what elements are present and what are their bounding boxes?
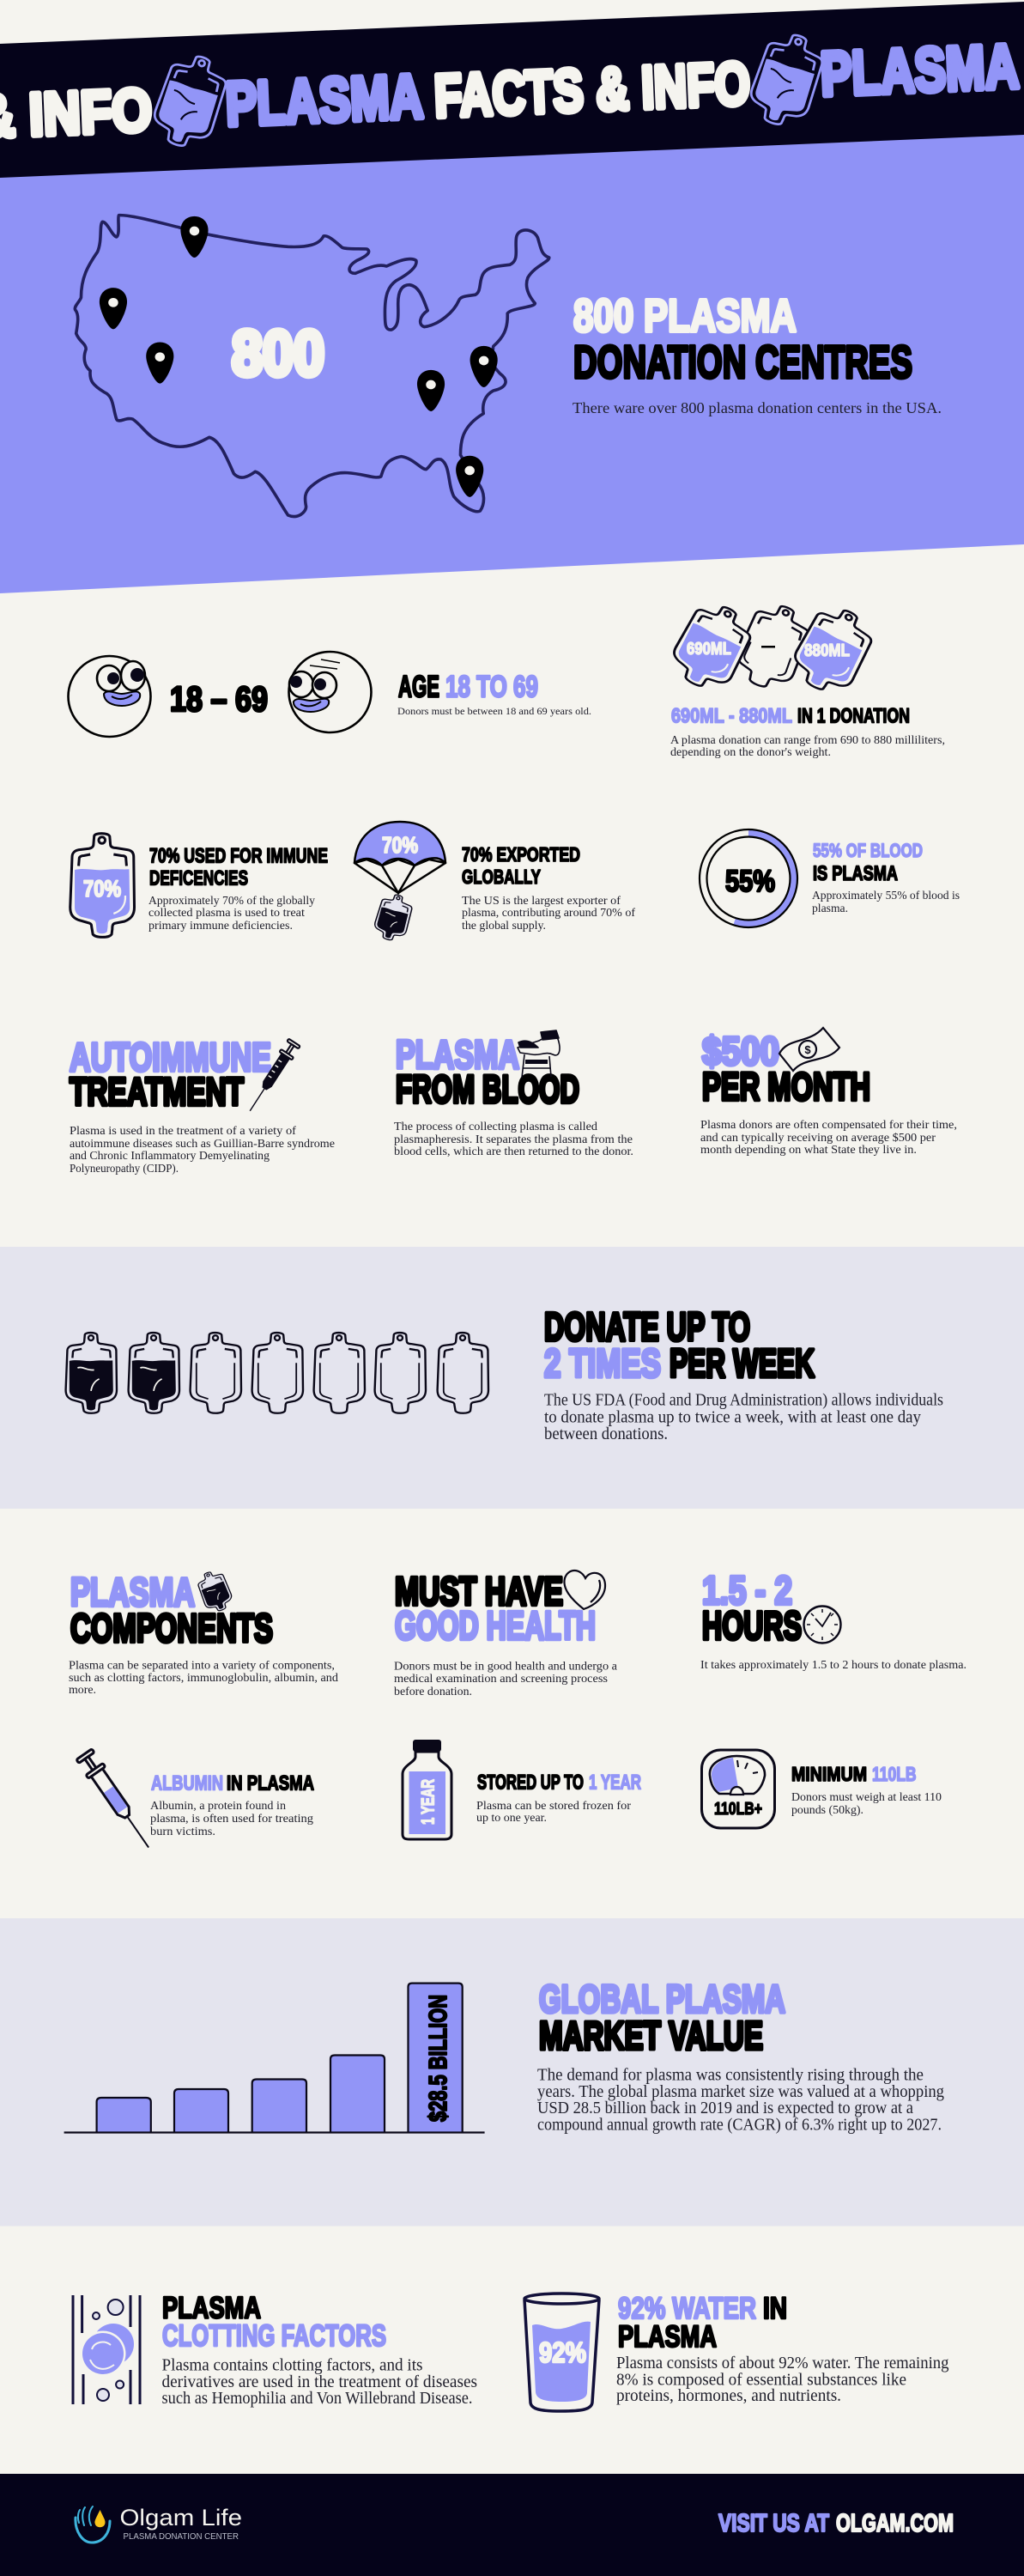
icon: heart (564, 1571, 605, 1609)
body text (812, 890, 960, 915)
heading: 690ml - 880ml in 1 donation (671, 704, 910, 728)
heading: IN (763, 2292, 787, 2325)
body text: The US FDA (Food and Drug Administration) allows individuals (544, 1391, 943, 1410)
heading: 690ml - 880ml in 1 donation: 690ML - 880ML (671, 704, 792, 728)
heading: 92% WATER (618, 2292, 756, 2325)
heading: GLOBAL PLASMA (539, 1977, 785, 2021)
heading: 110LB (872, 1763, 917, 1785)
banner text plasma: PLASMA (224, 63, 424, 139)
icon: weighing scale: 110LB+ (714, 1799, 762, 1819)
body text: plasma, is often used for treating (150, 1813, 313, 1826)
body text: Plasma donors are often compensated for their time, (700, 1119, 957, 1132)
icon: blood vessel with clotting cells (73, 2295, 140, 2404)
panel: hero 800 donation centres (0, 133, 1024, 593)
body text (670, 734, 945, 759)
call to action: VISIT US AT (718, 2510, 829, 2537)
banner: plasma facts and info ticker (0, 2, 1024, 178)
body text: to donate plasma up to twice a week, with at least one day (544, 1408, 921, 1427)
bar chart (64, 1984, 485, 2133)
body text (148, 895, 315, 933)
body text: Donors must be in good health and undergo a (394, 1661, 618, 1673)
heading: DEFICENCIES (149, 867, 248, 890)
body text: Plasma can be stored frozen for (476, 1800, 631, 1813)
panel: 55% of blood is plasma (700, 829, 960, 927)
panel: must have good health (394, 1569, 618, 1698)
body text: Plasma can be separated into a variety of components, (69, 1659, 335, 1673)
icon: banner plasma bag right (744, 27, 829, 132)
heading (702, 1029, 870, 1109)
body text: plasma, contributing around 70% of (462, 907, 635, 920)
body text (700, 1119, 957, 1157)
panel: global plasma market value (0, 1918, 1024, 2226)
heading (151, 1772, 314, 1795)
body text: blood cells, which are then returned to the donor. (394, 1145, 633, 1158)
heading: GLOBALLY (462, 866, 541, 888)
heading (162, 2291, 386, 2353)
body text: primary immune deficiencies. (148, 920, 293, 933)
body text (476, 1800, 631, 1825)
icon: parachute carrying plasma bag: 70% (382, 832, 418, 858)
heading (618, 2292, 787, 2354)
heading: PER MONTH (702, 1065, 870, 1109)
panel: $500 per month (700, 1028, 957, 1157)
panel: 690ml to 880ml (664, 595, 945, 759)
donut chart 55%: 55% (725, 865, 775, 898)
age range label: 18 – 69 (170, 679, 268, 719)
body text: The demand for plasma was consistently rising through the (537, 2066, 924, 2085)
icon row: seven plasma bags, two filled (66, 1333, 488, 1413)
body text: Polyneuropathy (CIDP). (70, 1163, 179, 1176)
panel: 1.5 - 2 hours (700, 1568, 966, 1672)
body text (462, 895, 635, 933)
body text: Donors must be between 18 and 69 years old. (397, 705, 591, 717)
heading: PLASMA (618, 2320, 717, 2354)
heading (702, 1568, 802, 1648)
logo: olgam life: PLASMA DONATION CENTER (124, 2531, 239, 2542)
body text: compound annual growth rate (CAGR) of 6.3% right up to 2027. (537, 2116, 942, 2135)
panel: albumin in plasma (76, 1748, 314, 1853)
logo: olgam life: Olgam Life (120, 2505, 242, 2530)
panel: stored up to 1 year (403, 1740, 641, 1839)
footer (0, 2474, 1024, 2576)
heading: 70% USED FOR IMMUNE (149, 845, 328, 867)
body text (70, 1125, 335, 1176)
panel: autoimmune treatment (70, 1035, 335, 1176)
heading (70, 1035, 271, 1114)
heading: age 18 to 69: AGE (398, 670, 439, 704)
body text (161, 2356, 477, 2408)
body text (150, 1800, 313, 1838)
body text: USD 28.5 billion back in 2019 and is expected to grow at a (537, 2099, 913, 2117)
body text: 8% is composed of essential substances like (616, 2372, 906, 2389)
icon: young face (69, 656, 151, 737)
icon: tilted dark plasma bag (194, 1567, 235, 1615)
body text: Albumin, a protein found in (150, 1800, 286, 1813)
donut chart 55% (700, 829, 797, 927)
icon: clock (803, 1606, 841, 1643)
body text: plasmapheresis. It separates the plasma from the (394, 1133, 633, 1146)
heading (395, 1569, 596, 1648)
body text: Approximately 70% of the globally (148, 895, 315, 908)
body text: autoimmune diseases such as Guillian-Barre syndrome (70, 1138, 335, 1151)
body text: the global supply. (462, 920, 546, 933)
body text: The process of collecting plasma is called (394, 1121, 597, 1133)
heading (462, 843, 580, 888)
heading: 1 YEAR (589, 1771, 641, 1795)
body text: Plasma is used in the treatment of a variety of (70, 1125, 296, 1138)
body text: burn victims. (150, 1826, 215, 1838)
icon: donation chair (518, 1030, 560, 1078)
panel: 70% exported globally (354, 822, 635, 944)
heading: 70% EXPORTED (462, 843, 580, 866)
icon: three plasma bags: 690ML (687, 640, 731, 659)
icon: banner plasma bag left (148, 48, 233, 154)
body text: and can typically receiving on average $500 per (700, 1132, 936, 1145)
body text: more. (69, 1684, 96, 1697)
icon: banknote: $ (804, 1043, 811, 1056)
icon: three plasma bags: 880ML (804, 641, 850, 660)
body text (394, 1661, 618, 1698)
heading: 690ml - 880ml in 1 donation: IN 1 DONATION (797, 704, 910, 728)
heading: 55% OF BLOOD (813, 840, 923, 861)
body text: A plasma donation can range from 690 to 880 milliliters, (670, 734, 945, 747)
panel: 70% used for immune deficiencies (70, 834, 328, 937)
hero body text: There ware over 800 plasma donation centers in the USA. (573, 399, 942, 416)
heading: IN PLASMA (227, 1772, 314, 1795)
big number 800: 800 (232, 318, 324, 389)
heading: HOURS (702, 1603, 802, 1648)
body text (69, 1659, 338, 1697)
icon: older face (288, 652, 371, 732)
panel: age 18 to 69 (69, 652, 591, 737)
body text: Donors must weigh at least 110 (791, 1791, 942, 1804)
heading: IS PLASMA (813, 862, 898, 885)
heading: PLASMA (162, 2291, 261, 2325)
body text: medical examination and screening process (394, 1673, 608, 1686)
heading: ALBUMIN (151, 1772, 223, 1795)
body text: Plasma consists of about 92% water. The remaining (616, 2354, 949, 2372)
body text (394, 1121, 633, 1158)
heading: DONATE UP TO (544, 1304, 750, 1349)
heading: 800 plasma donation centres: 800 PLASMA (573, 290, 797, 342)
map of the USA with location pins (75, 216, 549, 516)
heading (544, 1304, 815, 1386)
heading: 2 TIMES (544, 1341, 661, 1386)
panel: donate up to 2 times per week (0, 1247, 1024, 1509)
heading: PER WEEK (670, 1341, 815, 1386)
body text (791, 1791, 942, 1817)
heading: PLASMA (396, 1032, 519, 1077)
heading: TREATMENT (70, 1070, 244, 1114)
heading: AUTOIMMUNE (70, 1035, 271, 1079)
heading: $500 (702, 1029, 779, 1073)
body text: pounds (50kg). (791, 1804, 863, 1817)
heading: PLASMA (70, 1570, 195, 1614)
heading: MARKET VALUE (539, 2013, 763, 2057)
heading: 800 plasma donation centres (573, 290, 912, 388)
panel: plasma from blood (394, 1030, 633, 1158)
icon: 70% plasma bag (70, 834, 134, 937)
heading: MINIMUM (791, 1763, 867, 1785)
heading: CLOTTING FACTORS (162, 2319, 386, 2353)
icon: banknote (779, 1028, 839, 1071)
icon: bottle: 1 YEAR (419, 1779, 438, 1825)
icon: syringe with plasma (76, 1748, 157, 1853)
icon: syringe (244, 1038, 300, 1115)
heading (539, 1977, 785, 2057)
body text: It takes approximately 1.5 to 2 hours to donate plasma. (700, 1659, 966, 1672)
body text: such as clotting factors, immunoglobulin, albumin, and (69, 1672, 338, 1685)
body text: depending on the donor's weight. (670, 746, 831, 759)
panel: minimum 110lb (702, 1750, 942, 1828)
heading: age 18 to 69: 18 TO 69 (445, 670, 538, 704)
heading (396, 1032, 579, 1111)
heading: GOOD HEALTH (395, 1603, 596, 1648)
body text: years. The global plasma market size was valued at a whopping (537, 2083, 944, 2101)
icon: three plasma bags (664, 595, 880, 701)
body text: Plasma contains clotting factors, and its (161, 2356, 422, 2375)
heading (70, 1570, 273, 1650)
logo: olgam life (76, 2505, 242, 2543)
heading: FROM BLOOD (396, 1067, 579, 1111)
banner text facts and info: FACTS & INFO (433, 50, 751, 130)
icon: glass of water (524, 2293, 599, 2411)
body text: Approximately 55% of blood is (812, 890, 960, 902)
body text: plasma. (812, 902, 848, 915)
body text: before donation. (394, 1686, 472, 1698)
heading: STORED UP TO (477, 1771, 584, 1795)
body text (537, 2066, 944, 2135)
body text: up to one year. (476, 1812, 547, 1825)
icon: glass of water: 92% (539, 2336, 586, 2368)
body text (616, 2354, 949, 2405)
bar value label: $28.5 BILLION (425, 1995, 452, 2122)
panel: plasma components (69, 1567, 338, 1697)
icon: weighing scale (702, 1750, 774, 1828)
body text (544, 1391, 943, 1443)
body text: derivatives are used in the treatment of diseases (161, 2373, 477, 2391)
body text: The US is the largest exporter of (462, 895, 621, 908)
panel: plasma clotting factors (73, 2291, 477, 2408)
call to action: OLGAM.COM (836, 2510, 954, 2537)
heading: COMPONENTS (70, 1606, 273, 1650)
body text: and Chronic Inflammatory Demyelinating (70, 1150, 270, 1163)
body text: month depending on what State they live in. (700, 1144, 917, 1157)
panel: 92% water in plasma (524, 2292, 949, 2411)
body text: between donations. (544, 1425, 668, 1443)
body text: collected plasma is used to treat (148, 907, 305, 920)
heading (149, 845, 328, 890)
icon: parachute carrying plasma bag (354, 822, 445, 944)
heading: age 18 to 69 (398, 670, 538, 704)
heading (813, 840, 923, 885)
heading: 1.5 - 2 (702, 1568, 792, 1613)
body text: such as Hemophilia and Von Willebrand Disease. (161, 2390, 472, 2408)
icon: bottle (403, 1740, 451, 1839)
icon: 70% plasma bag: 70% (83, 876, 121, 902)
heading: MUST HAVE (395, 1569, 563, 1613)
call to action (718, 2510, 954, 2537)
body text: proteins, hormones, and nutrients. (616, 2387, 841, 2405)
